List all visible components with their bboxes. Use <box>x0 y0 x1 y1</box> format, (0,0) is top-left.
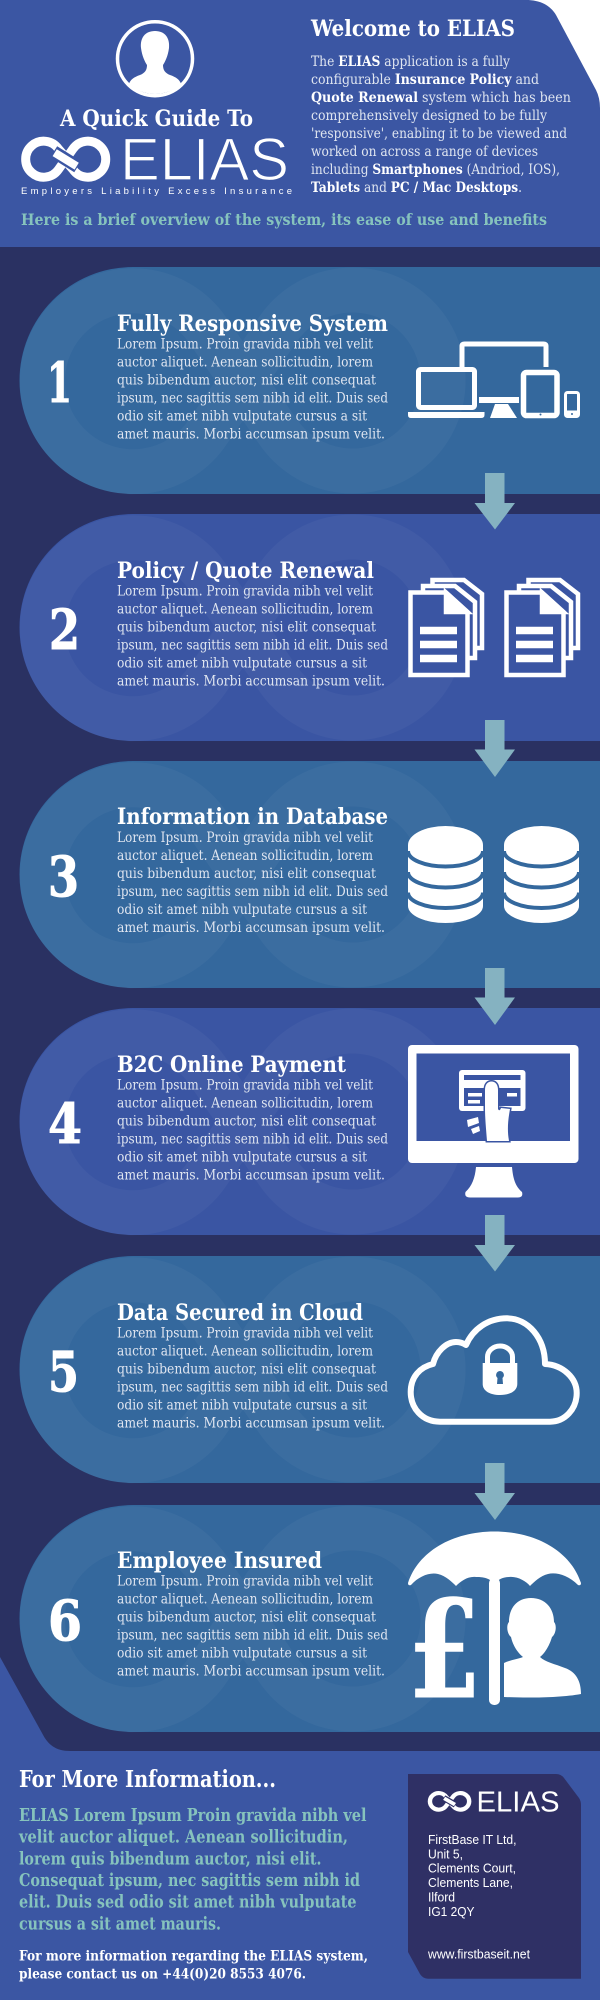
step text: Lorem Ipsum. Proin gravida nibh vel velit <box>117 336 374 352</box>
step text: quis bibendum auctor, nisi elit consequat <box>117 620 377 636</box>
footer teal text: ELIAS Lorem Ipsum Proin gravida nibh vel <box>19 1805 367 1826</box>
dark central band <box>0 247 600 1751</box>
panel background <box>19 761 600 988</box>
step text: Lorem Ipsum. Proin gravida nibh vel velit <box>117 1326 374 1342</box>
panel: step 2 <box>19 514 600 741</box>
panel background <box>19 514 600 741</box>
contact line: For more information regarding the ELIAS system, <box>19 1949 368 1965</box>
intro text block: Quote Renewal system which has been <box>311 90 571 106</box>
address: Clements Lane, <box>428 1876 513 1890</box>
intro text block <box>311 54 571 196</box>
step text: amet mauris. Morbi accumsan ipsum velit. <box>117 674 385 690</box>
icon: umbrella over pound and employee: £ <box>408 1570 481 1729</box>
infinity watermark <box>42 784 443 966</box>
intro text block: configurable Insurance Policy and <box>311 72 539 88</box>
step text: ipsum, nec sagittis sem nibh id elit. Duis sed <box>117 390 388 406</box>
step text: ipsum, nec sagittis sem nibh id elit. Duis sed <box>117 884 388 900</box>
step text: Lorem Ipsum. Proin gravida nibh vel velit <box>117 1078 374 1094</box>
icon: responsive devices <box>408 344 579 418</box>
panel: step 5 <box>19 1256 600 1483</box>
footer teal text: Consequat ipsum, nec sagittis sem nibh id <box>19 1870 360 1891</box>
step text: auctor aliquet. Aenean sollicitudin, lorem <box>117 848 373 864</box>
panel background <box>19 1008 600 1235</box>
icon: umbrella over pound and employee <box>408 1532 581 1729</box>
infinity watermark <box>42 1279 443 1461</box>
intro text block: The ELIAS application is a fully <box>311 54 510 70</box>
infinity watermark <box>42 1031 443 1213</box>
step text: amet mauris. Morbi accumsan ipsum velit. <box>117 1664 385 1680</box>
logo: small ELIAS <box>430 1786 560 1818</box>
panel: step 3 <box>19 761 600 988</box>
step text <box>117 584 388 690</box>
step text: amet mauris. Morbi accumsan ipsum velit. <box>117 426 385 442</box>
footer teal text: velit auctor aliquet. Aenean sollicitudin, <box>18 1827 348 1848</box>
address: FirstBase IT Ltd, <box>428 1833 516 1847</box>
step number: 2 <box>49 597 80 662</box>
database left <box>408 826 483 923</box>
intro text block: worked on across a range of devices <box>311 144 538 160</box>
footer teal text: elit. Duis sed odio sit amet nibh vulputate <box>19 1892 356 1913</box>
address <box>428 1833 516 1919</box>
step text <box>117 1078 388 1184</box>
intro text block: 'responsive', enabling it to be viewed and <box>311 126 567 142</box>
heading: welcome: Welcome to ELIAS <box>310 16 515 42</box>
step heading: Information in Database <box>117 804 388 830</box>
step text <box>117 830 388 936</box>
step text: ipsum, nec sagittis sem nibh id elit. Duis sed <box>117 1628 388 1644</box>
panel: step 4 <box>19 1008 600 1235</box>
panel: welcome intro <box>310 16 571 196</box>
step text: Lorem Ipsum. Proin gravida nibh vel velit <box>117 1574 374 1590</box>
contact line <box>19 1949 368 1982</box>
footer heading: For More Information... <box>19 1766 276 1793</box>
panel background <box>19 1505 600 1732</box>
step text: amet mauris. Morbi accumsan ipsum velit. <box>117 1168 385 1184</box>
arrow: step 1 to 2 <box>474 473 515 530</box>
small logo wordmark: ELIAS <box>476 1786 560 1818</box>
step text: odio sit amet nibh vulputate cursus a sit <box>117 1646 368 1662</box>
panel: footer information <box>18 1766 368 1982</box>
footer teal text: cursus a sit amet mauris. <box>19 1913 221 1934</box>
step text: quis bibendum auctor, nisi elit consequat <box>117 1114 377 1130</box>
step number: 1 <box>47 350 72 415</box>
panel: step 6 <box>19 1505 600 1732</box>
heading: a quick guide to: A Quick Guide To <box>59 106 253 132</box>
step text <box>117 1574 388 1680</box>
step text: quis bibendum auctor, nisi elit consequat <box>117 866 377 882</box>
step heading: Data Secured in Cloud <box>117 1300 363 1326</box>
footer teal text <box>18 1805 367 1934</box>
step number: 3 <box>48 844 79 909</box>
step text: odio sit amet nibh vulputate cursus a sit <box>117 1398 368 1414</box>
address: Ilford <box>428 1891 455 1905</box>
step heading: B2C Online Payment <box>117 1052 347 1078</box>
infinity watermark <box>42 537 443 719</box>
address: Unit 5, <box>428 1848 463 1862</box>
arrow: step 3 to 4 <box>474 968 515 1025</box>
step number: 4 <box>48 1091 82 1156</box>
step text: quis bibendum auctor, nisi elit consequat <box>117 372 377 388</box>
hand <box>467 1082 510 1141</box>
arrow: step 2 to 3 <box>474 720 515 777</box>
step number: 6 <box>48 1588 82 1653</box>
step text: auctor aliquet. Aenean sollicitudin, lorem <box>117 602 373 618</box>
step text: ipsum, nec sagittis sem nibh id elit. Duis sed <box>117 1132 388 1148</box>
contact line: please contact us on +44(0)20 8553 4076. <box>19 1966 306 1982</box>
icon: online payment monitor <box>408 1045 578 1198</box>
step number: 5 <box>48 1339 79 1404</box>
step text: odio sit amet nibh vulputate cursus a sit <box>117 408 368 424</box>
address: IG1 2QY <box>428 1905 475 1919</box>
intro text block: including Smartphones (Andriod, IOS), <box>311 162 560 178</box>
step text: ipsum, nec sagittis sem nibh id elit. Duis sed <box>117 1380 388 1396</box>
step heading: Fully Responsive System <box>117 311 388 337</box>
step text: auctor aliquet. Aenean sollicitudin, lorem <box>117 354 373 370</box>
card background <box>408 1774 581 1979</box>
intro text block: comprehensively designed to be fully <box>311 108 547 124</box>
infinity watermark <box>42 290 443 472</box>
step heading: Policy / Quote Renewal <box>117 558 374 584</box>
address: Clements Court, <box>428 1862 516 1876</box>
step heading: Employee Insured <box>117 1548 322 1574</box>
step text: auctor aliquet. Aenean sollicitudin, lorem <box>117 1592 373 1608</box>
step text: auctor aliquet. Aenean sollicitudin, lorem <box>117 1344 373 1360</box>
step text: quis bibendum auctor, nisi elit consequat <box>117 1362 377 1378</box>
panel: header left branding <box>21 22 292 197</box>
panel background <box>19 1256 600 1483</box>
step text: auctor aliquet. Aenean sollicitudin, lorem <box>117 1096 373 1112</box>
document stack left <box>410 580 482 675</box>
logo tagline: Employers Liability Excess Insurance <box>21 186 292 197</box>
step text: odio sit amet nibh vulputate cursus a sit <box>117 656 368 672</box>
website: www.firstbaseit.net <box>427 1948 531 1962</box>
intro text block: Tablets and PC / Mac Desktops. <box>311 180 522 196</box>
step text: Lorem Ipsum. Proin gravida nibh vel velit <box>117 830 374 846</box>
footer teal text: lorem quis bibendum auctor, nisi elit. <box>19 1848 322 1869</box>
step text <box>117 1326 388 1432</box>
overview subheading: Here is a brief overview of the system, its ease of use and benefits <box>21 210 547 229</box>
step text: Lorem Ipsum. Proin gravida nibh vel velit <box>117 584 374 600</box>
database right <box>504 826 579 923</box>
step text: amet mauris. Morbi accumsan ipsum velit. <box>117 920 385 936</box>
icon: user portrait <box>118 22 192 96</box>
step text <box>117 336 388 442</box>
arrow: step 4 to 5 <box>474 1215 515 1272</box>
credit card <box>459 1070 526 1111</box>
icon: document stacks <box>410 580 578 675</box>
step text: quis bibendum auctor, nisi elit consequat <box>117 1610 377 1626</box>
icon: small infinity link <box>430 1793 469 1810</box>
logo: ELIAS <box>26 126 289 193</box>
icon: infinity link <box>26 141 106 177</box>
icon: databases <box>408 826 579 923</box>
arrow: step 5 to 6 <box>474 1463 515 1520</box>
icon: cloud with padlock <box>411 1318 577 1422</box>
infinity watermark <box>42 1528 443 1710</box>
logo wordmark: ELIAS <box>120 126 289 193</box>
step text: odio sit amet nibh vulputate cursus a sit <box>117 902 368 918</box>
panel background <box>19 267 600 494</box>
panel: contact card <box>408 1774 581 1979</box>
document stack right <box>506 580 578 675</box>
step text: amet mauris. Morbi accumsan ipsum velit. <box>117 1416 385 1432</box>
step text: ipsum, nec sagittis sem nibh id elit. Duis sed <box>117 638 388 654</box>
step text: odio sit amet nibh vulputate cursus a sit <box>117 1150 368 1166</box>
panel: step 1 <box>19 267 600 494</box>
